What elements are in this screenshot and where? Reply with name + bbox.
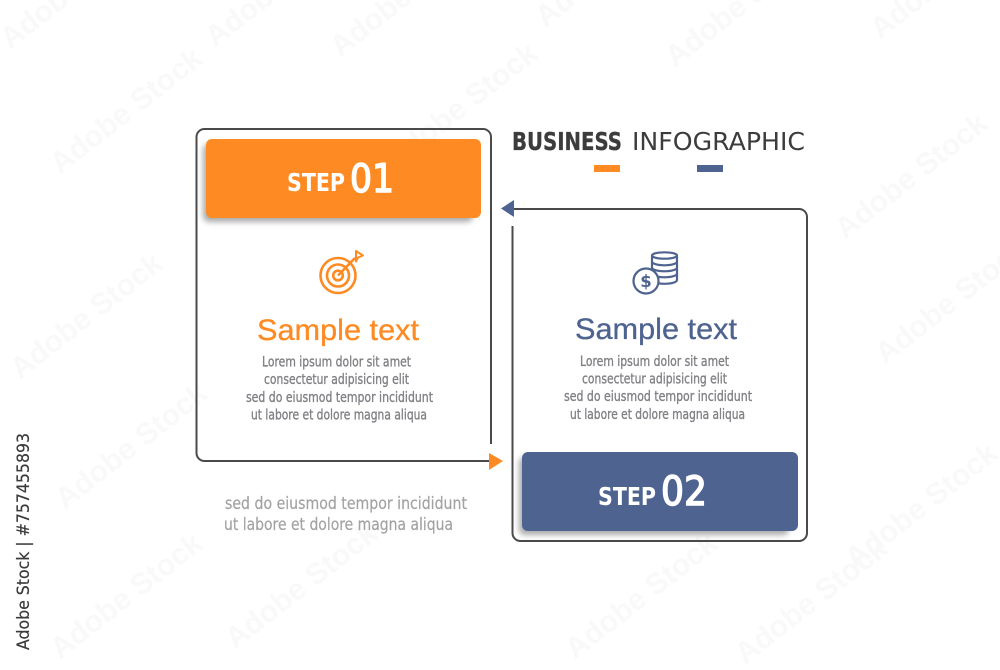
icon: target [320,251,363,293]
title [512,127,805,156]
watermark pattern: Adobe Stock [49,376,214,516]
heading: sample text orange: Sample text [257,314,419,347]
text block: step 02 description: Lorem ipsum dolor sit amet [580,354,729,370]
step number: 02 [661,467,707,515]
icon: coins: $ [640,272,652,291]
watermark pattern: Adobe Stock [219,516,384,656]
header shadow [203,144,473,222]
arrow: orange [489,453,503,470]
text block: step 02 description: sed do eiusmod tempor incididunt [564,389,752,405]
text block: bottom caption: sed do eiusmod tempor incididunt [225,494,467,513]
title: BUSINESS [512,127,622,156]
step label: STEP [287,168,345,197]
step label: STEP [598,482,656,511]
title accent: blue [697,165,723,172]
header: step 01 [206,139,481,218]
panel: step 01 [196,129,503,470]
heading: sample text blue: Sample text [575,313,737,346]
stock id label: Adobe Stock | #757455893 [14,433,34,650]
watermark pattern: Adobe Stock [829,106,994,246]
watermark pattern: Adobe Stock [729,531,894,670]
icon: coins [634,252,677,294]
text block: bottom caption [224,494,467,534]
text block: step 01 description [246,354,433,424]
step number: 01 [350,156,394,202]
text block: step 01 description: consectetur adipisicing elit [264,372,409,388]
title accent: orange [594,165,620,172]
watermark pattern: Adobe Stock [379,36,544,176]
header: step 02 [522,452,798,531]
arrow: blue [501,200,514,217]
panel outline: step 01 [196,129,492,461]
text block: step 01 description: ut labore et dolore magna aliqua [251,408,427,424]
title: INFOGRAPHIC [632,127,805,156]
panel outline: step 02 [512,209,807,541]
watermark pattern: Adobe Stock [559,526,724,666]
text block: step 01 description: Lorem ipsum dolor sit amet [262,354,411,370]
panel: step 02 [501,200,807,541]
watermark pattern: Adobe Stock [44,41,209,181]
text block: bottom caption: ut labore et dolore magna aliqua [224,515,453,534]
text block: step 02 description: consectetur adipisicing elit [582,372,727,388]
text block: step 01 description: sed do eiusmod tempor incididunt [246,390,433,406]
text block: step 02 description [564,354,752,423]
text block: step 02 description: ut labore et dolore magna aliqua [570,407,745,423]
watermark pattern: Adobe Stock [44,526,209,666]
watermark pattern: Adobe Stock [4,246,169,386]
watermark pattern: Adobe Stock [839,436,1000,576]
header shadow [519,457,789,535]
